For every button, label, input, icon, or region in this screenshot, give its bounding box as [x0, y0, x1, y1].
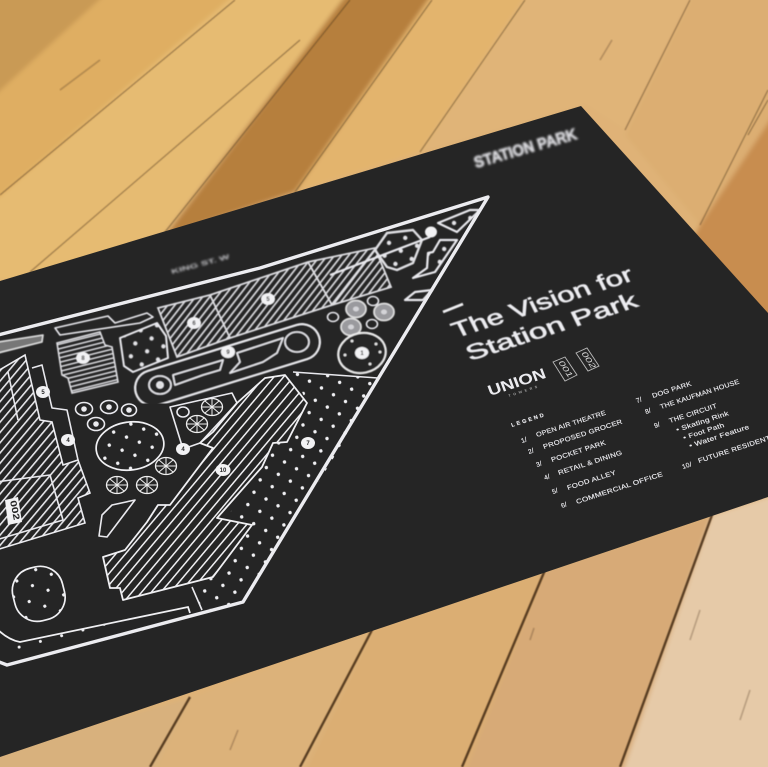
future residential building 10	[103, 375, 307, 600]
legend items right: DOG PARK	[651, 381, 693, 400]
legend items right: 7/	[635, 397, 643, 405]
legend items left: 3/	[535, 461, 543, 469]
dotted round lawn	[93, 418, 167, 474]
small plaza: 4	[181, 447, 185, 453]
the circuit loop	[149, 332, 309, 394]
union towers logo: UNION	[485, 365, 548, 400]
tower tag 002: 002	[579, 351, 599, 370]
legend items left: 6/	[560, 502, 568, 510]
hatched commercial band: 5	[266, 297, 270, 303]
ring planters	[76, 400, 136, 430]
legend items right: THE CIRCUIT	[668, 403, 718, 425]
dotted park 3: 7	[306, 441, 310, 447]
left hatched building: 4	[66, 438, 70, 444]
legend items right: • Skating Rink	[675, 410, 731, 434]
legend items left: 4/	[543, 474, 551, 482]
002 tag	[5, 497, 22, 525]
top right plots	[330, 210, 480, 300]
leaf planter	[99, 500, 135, 537]
open air theatre	[334, 328, 390, 378]
legend items right: THE KAUFMAN HOUSE	[659, 379, 741, 411]
the circuit loop: 9	[226, 350, 230, 356]
legend items left: RETAIL & DINING	[557, 450, 623, 477]
shrubs upper	[328, 296, 394, 336]
legend items left: 1/	[520, 437, 528, 445]
lower left pocket park	[7, 561, 70, 626]
dotted park 3	[192, 372, 378, 610]
left hatched building	[0, 355, 90, 550]
band: upper strips	[0, 313, 153, 353]
wordmark: Station Park: STATION PARK	[472, 126, 579, 172]
title line two: Station Park	[461, 288, 643, 365]
pocket park top	[375, 230, 422, 270]
tower tag 002	[576, 348, 599, 371]
legend items left: FOOD ALLEY	[566, 469, 618, 492]
legend items right	[635, 379, 768, 471]
future residential building 10: 10	[220, 468, 227, 474]
legend items left: POCKET PARK	[550, 440, 607, 464]
002 tag: 002	[8, 499, 22, 521]
legend items left: 5/	[551, 488, 559, 496]
union towers logo: TOWERS	[508, 385, 539, 398]
tower tag 001	[553, 357, 577, 381]
building: striped block 8	[57, 332, 118, 393]
legend items left: OPEN AIR THEATRE	[535, 410, 608, 439]
legend items left	[520, 410, 665, 510]
title block	[443, 262, 643, 365]
small plaza	[170, 393, 237, 455]
title: The Vision for	[447, 262, 637, 342]
site map	[0, 197, 488, 665]
left hatched building: 5	[41, 390, 45, 396]
legend items left: COMMERCIAL OFFICE	[575, 471, 665, 506]
tower tag 001: 001	[556, 360, 576, 379]
trees	[106, 398, 222, 494]
map outline	[0, 197, 488, 665]
street label: KING ST. W	[170, 253, 232, 276]
legend items left: 2/	[527, 448, 535, 456]
open air theatre: 1	[360, 351, 364, 357]
legend items right: • Foot Path	[682, 422, 726, 442]
far map details	[0, 210, 480, 394]
perimeter path	[0, 607, 190, 660]
legend items left: PROPOSED GROCER	[542, 419, 624, 451]
food alley dotted court	[120, 323, 168, 372]
legend items right: 8/	[644, 408, 652, 416]
title dash	[443, 304, 463, 312]
legend heading: LEGEND	[511, 413, 545, 429]
legend items right: • Water Feature	[688, 424, 751, 450]
hatched commercial band: 6	[192, 321, 196, 327]
building: striped block 8: 8	[81, 356, 85, 362]
legend items right: 9/	[653, 422, 661, 430]
legend items right: 10/	[681, 461, 693, 471]
hatched commercial band	[158, 248, 391, 357]
legend	[511, 379, 768, 510]
